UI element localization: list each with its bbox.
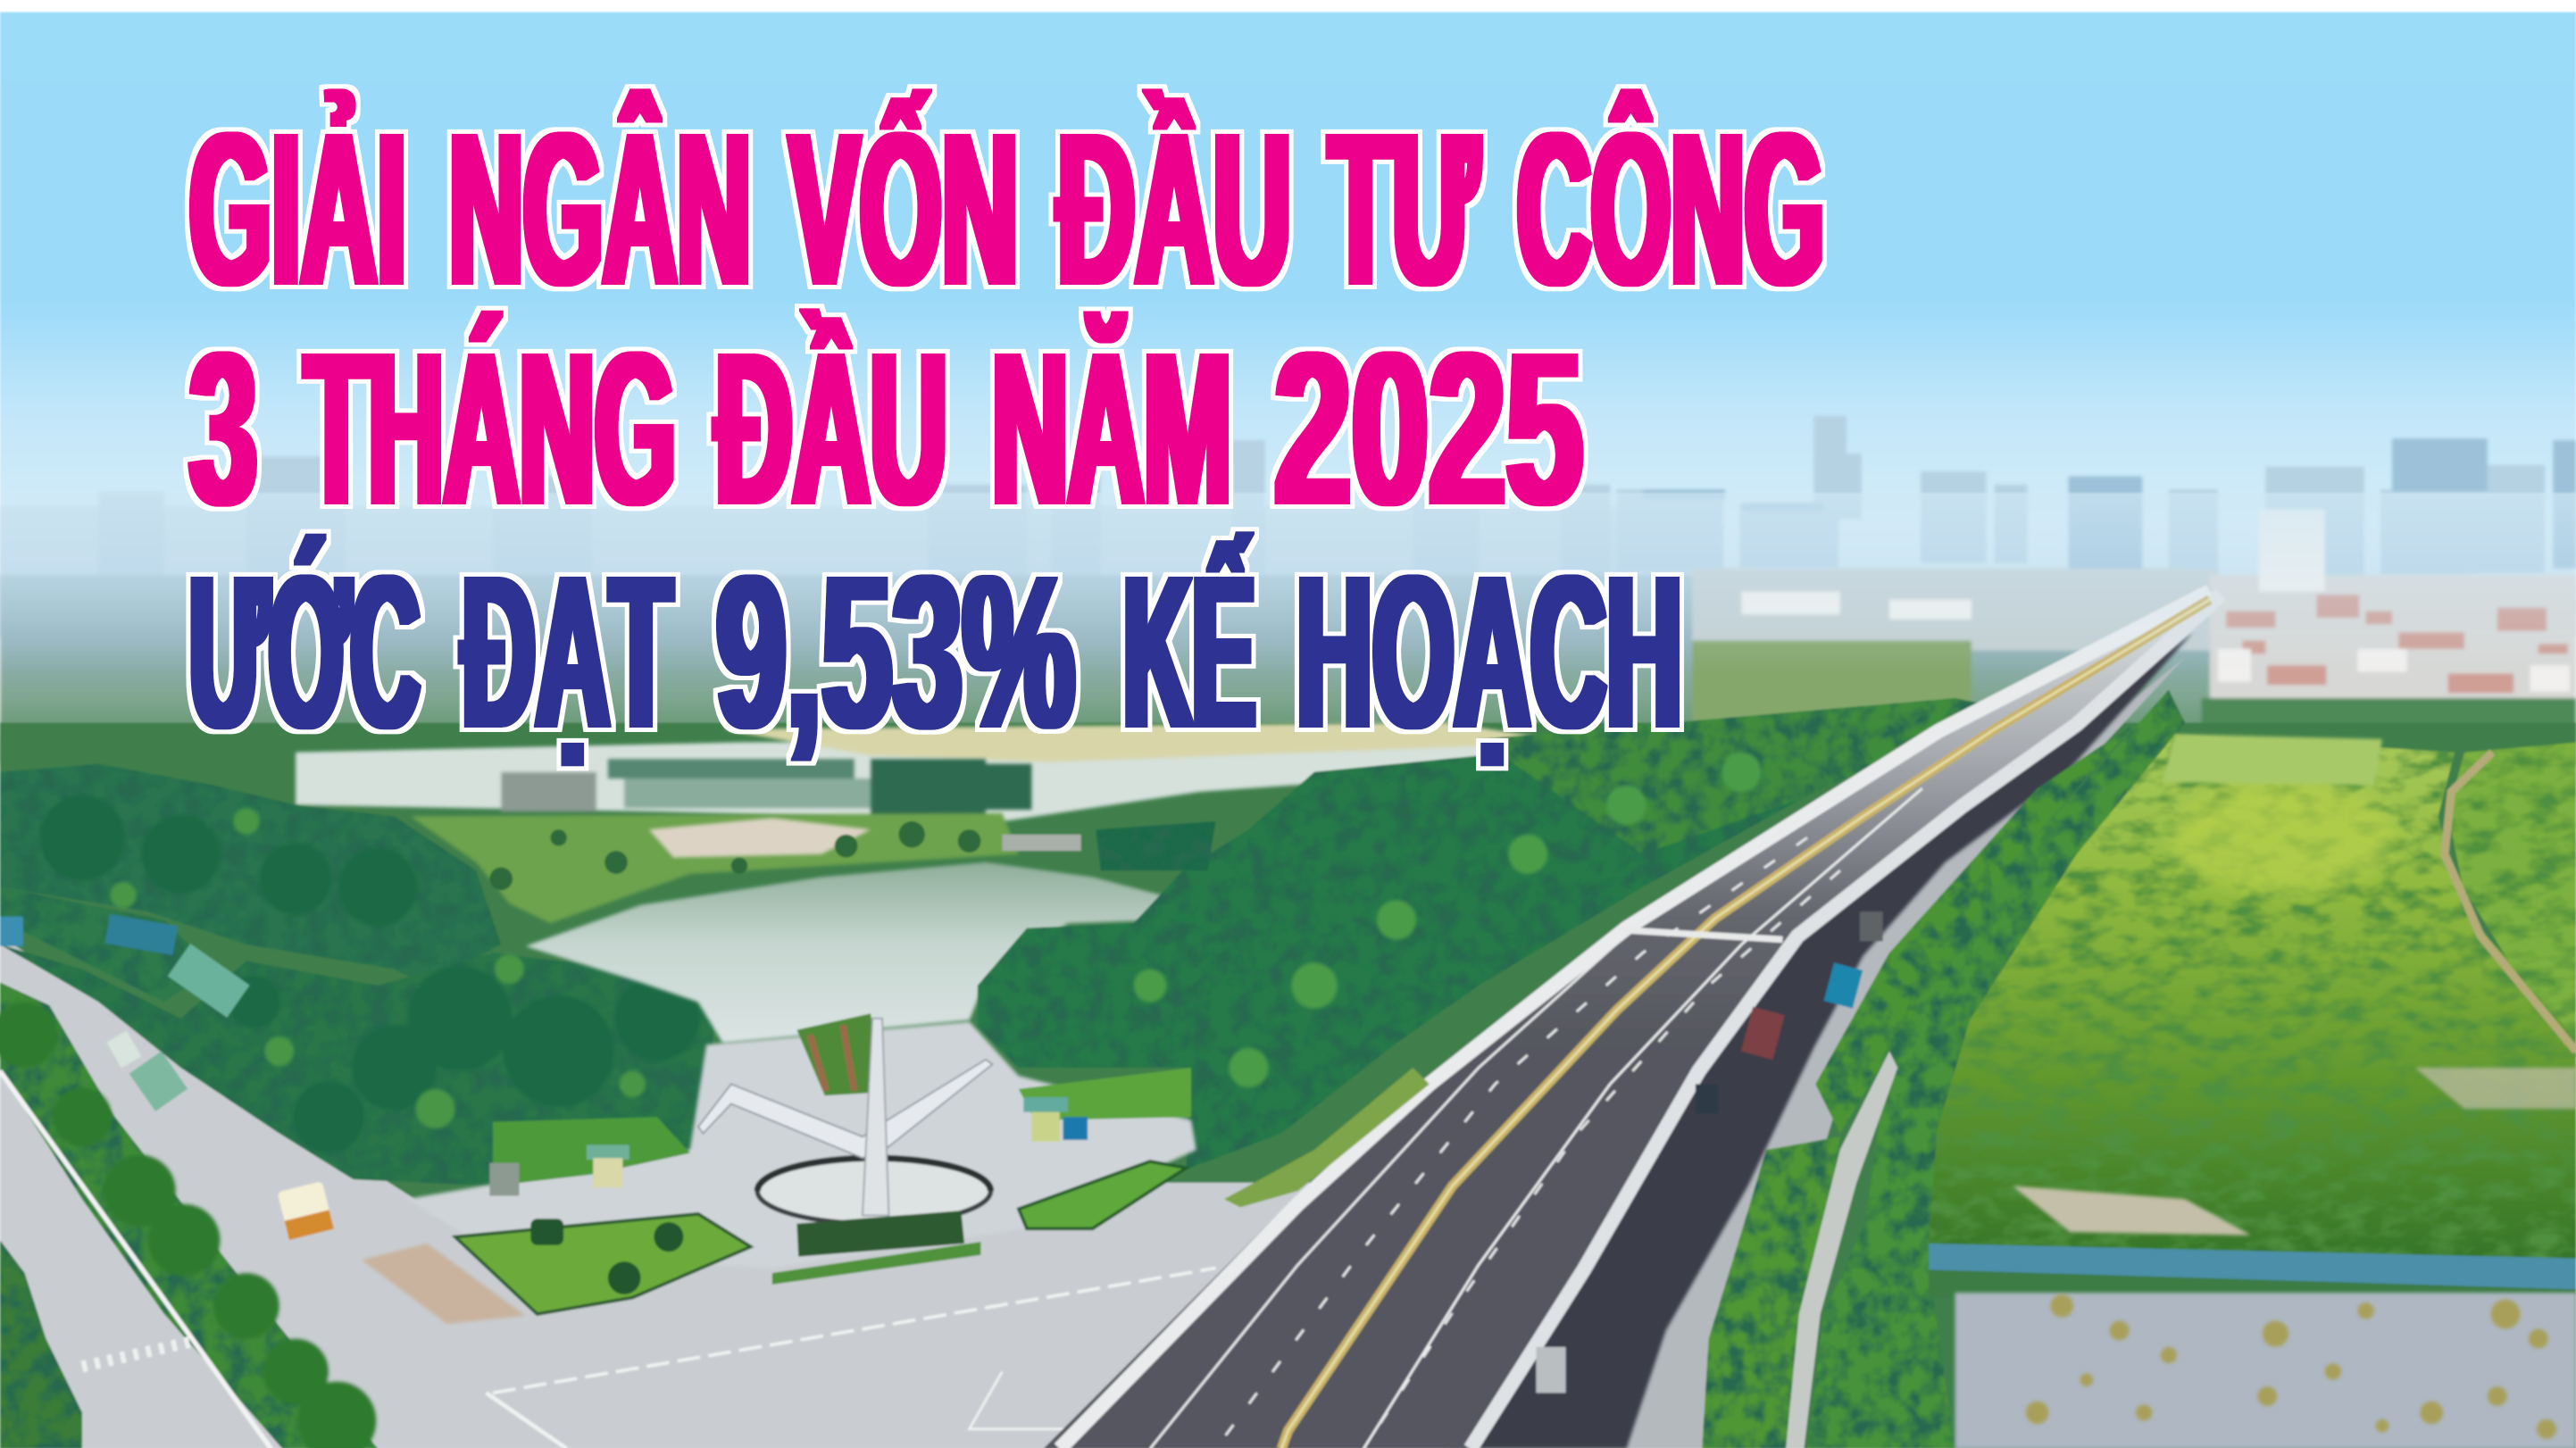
paved area on the lawn: [649, 818, 871, 857]
atmospheric haze: [0, 493, 2576, 673]
paved lot: [1955, 1293, 2576, 1448]
title line 1: NGÂN: [449, 88, 751, 330]
road under and beside the highway: [1052, 657, 2185, 1448]
second tree row right of the highway: [1807, 690, 2185, 1448]
first tree row right of the highway: [1702, 1136, 1840, 1448]
lawn behind the plaza left: [493, 1117, 690, 1186]
blue fence: [1929, 1244, 2576, 1298]
sidewalk between tree rows: [1786, 1052, 1897, 1448]
title line 1: TƯ: [1329, 88, 1479, 330]
title line 3: 9,53%: [716, 531, 1075, 773]
vehicles under the highway: [1536, 911, 1883, 1393]
planter with sign: [772, 1211, 980, 1285]
background: white top band: [0, 0, 2576, 12]
fountain: [757, 1158, 991, 1224]
lighter tree highlights by the highway: [1134, 753, 1761, 1087]
left bottom trees: [0, 1240, 82, 1448]
road surface base: [0, 936, 1314, 1448]
lawn lower right of the plaza: [1019, 1161, 1186, 1228]
title line 2: NĂM: [992, 308, 1231, 550]
median tree clumps: [0, 1002, 376, 1448]
monument obelisk: [863, 1019, 888, 1216]
trees between park lake and highway: [978, 698, 1997, 1169]
dark green trees on the left of the park: [0, 764, 714, 1186]
small trees on the lawn: [489, 821, 980, 890]
curved tan path: [2445, 753, 2576, 1052]
lawn near kiosk right: [1019, 1068, 1191, 1120]
title line 3: ĐẠT: [462, 531, 672, 773]
plaza: [407, 1021, 1196, 1268]
lot weed patches: [2026, 1294, 2556, 1439]
monument wings: [698, 1060, 992, 1158]
title line 3: [189, 531, 1682, 773]
green field: [1929, 734, 2576, 1261]
bright patch in the field: [2169, 782, 2398, 894]
title: [189, 88, 1824, 773]
green strip beside the highway: [1224, 1068, 1430, 1207]
kiosks: [489, 1097, 1088, 1196]
title line 3: ƯỚC: [189, 531, 420, 773]
palm rows across the upper lake: [608, 759, 1032, 818]
tree clumps on the left: [39, 795, 700, 1153]
road edge: [0, 1071, 271, 1448]
title line 1: [189, 88, 1824, 330]
sky: [0, 12, 2576, 637]
buses and trucks on service road: [0, 914, 334, 1240]
rubble patches in field: [2013, 1068, 2576, 1236]
title line 2: THÁNG: [304, 308, 676, 550]
text: CÔNG: [1517, 88, 1824, 330]
field right of the path: [2448, 743, 2576, 1038]
main lake: [526, 862, 1207, 1043]
title line 2: 2025: [1274, 308, 1583, 550]
road markings: [487, 1268, 1216, 1448]
title: HOẠCH: [1296, 531, 1682, 773]
highway deck: [1043, 591, 2222, 1448]
upper lake: [164, 723, 1577, 828]
park grounds and far bank base: [0, 723, 2576, 1448]
title line 1: ĐẦU: [1057, 88, 1291, 330]
flower bed: [796, 1013, 879, 1095]
distant city band: [0, 509, 2576, 764]
crosswalk: [82, 1340, 197, 1367]
front lawn: [455, 1214, 751, 1314]
title line 3: KẾ: [1123, 531, 1255, 773]
lighter tree highlights on the left: [110, 808, 646, 1128]
park lawn behind the lake: [411, 813, 1019, 923]
title line 2: [189, 308, 1583, 550]
distant skyline: [0, 416, 2576, 637]
third tree row right of the highway: [1815, 723, 2136, 1134]
footbridge: [1002, 835, 1081, 851]
tree median on left: [0, 982, 378, 1448]
tan paved patch: [362, 1244, 526, 1324]
title line 1: VỐN: [789, 88, 1018, 330]
lawn shrubs: [530, 1219, 683, 1294]
title line 2: 3: [189, 308, 257, 550]
title line 2: ĐẦU: [715, 308, 947, 550]
pale top of field: [2162, 734, 2382, 786]
title line 1: GIẢI: [189, 88, 406, 330]
highway shadow: [1446, 632, 2193, 1448]
